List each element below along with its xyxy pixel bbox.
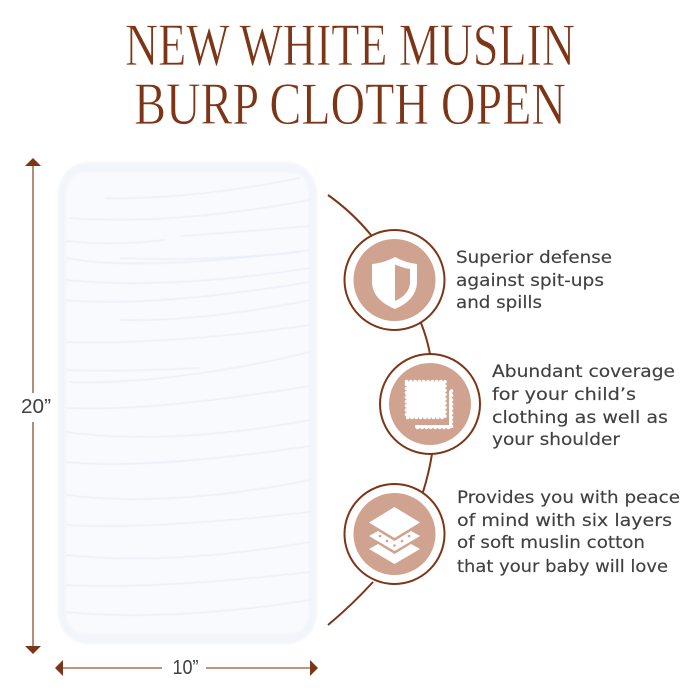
text: abundant coverage: Abundant coverage xyxy=(492,362,675,382)
text: superior defense xyxy=(456,248,612,313)
text: six layers: of soft muslin cotton xyxy=(457,533,645,553)
height dimension arrow: 20” xyxy=(21,396,51,418)
text: abundant coverage: for your child’s xyxy=(492,385,636,405)
text: superior defense: and spills xyxy=(456,293,542,313)
title: NEW WHITE MUSLIN xyxy=(125,12,575,78)
muslin cloth xyxy=(58,162,317,644)
height dimension arrow xyxy=(21,158,51,654)
title xyxy=(125,12,575,137)
text: six layers: Provides you with peace xyxy=(457,488,680,508)
text: six layers xyxy=(457,488,680,577)
connecting curve xyxy=(328,195,432,625)
text: superior defense: against spit-ups xyxy=(456,271,604,291)
text: superior defense: Superior defense xyxy=(456,248,612,268)
icon: shield xyxy=(344,230,444,330)
title: BURP CLOTH OPEN xyxy=(134,71,566,137)
width dimension arrow: 10” xyxy=(172,657,198,679)
width dimension arrow xyxy=(55,657,318,679)
icon: cloth coverage xyxy=(380,354,480,454)
text: abundant coverage: clothing as well as xyxy=(492,408,668,428)
text: six layers: that your baby will love xyxy=(457,557,668,577)
text: abundant coverage: your shoulder xyxy=(492,430,620,450)
text: six layers: of mind with six layers xyxy=(457,511,672,531)
icon: six layers xyxy=(344,484,444,584)
text: abundant coverage xyxy=(492,362,675,450)
